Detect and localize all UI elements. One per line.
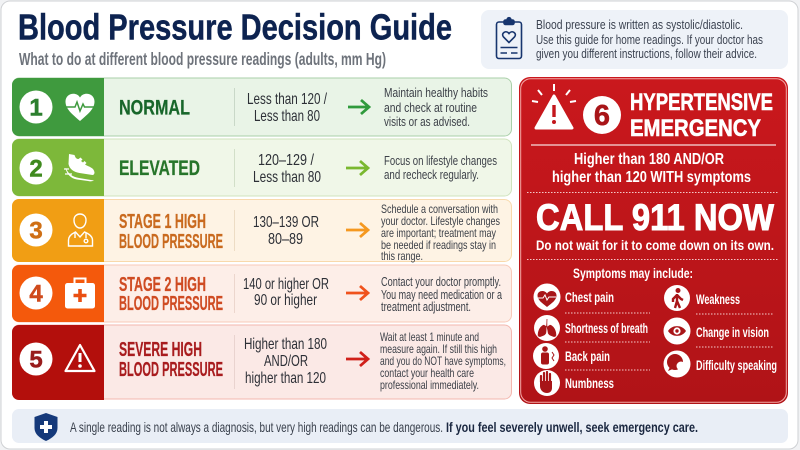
threshold: Higher than 180 AND/OR	[574, 151, 724, 168]
badge 5: 5	[29, 346, 43, 374]
panel: row 5 severe	[12, 325, 512, 400]
action: Schedule a conversation with	[381, 202, 498, 216]
action: visits or as advised.	[384, 115, 470, 129]
action: be needed if readings stay in	[381, 238, 496, 252]
reading	[253, 152, 321, 186]
symptoms list	[533, 284, 777, 396]
arrow	[348, 100, 369, 114]
reading: Higher than 180	[244, 336, 327, 353]
icon: shield	[34, 413, 58, 441]
info text	[536, 17, 763, 61]
icon: doctor	[68, 214, 92, 246]
action: this range.	[381, 249, 423, 263]
symptom: weakness	[664, 285, 740, 311]
symptom: numbness: Numbness	[565, 376, 614, 391]
label: BLOOD PRESSURE	[119, 293, 223, 315]
symptoms heading: Symptoms may include:	[573, 266, 693, 281]
action: You may need medication or a	[381, 288, 502, 302]
symptom: numbness	[534, 370, 614, 396]
symptom: back pain	[533, 343, 610, 369]
action: your doctor. Lifestyle changes	[381, 214, 500, 228]
arrow	[346, 286, 368, 300]
action	[384, 154, 497, 182]
action	[380, 330, 506, 392]
badge 3: 3	[29, 218, 43, 244]
action	[384, 86, 488, 129]
label: BLOOD PRESSURE	[119, 359, 223, 381]
label: NORMAL	[119, 96, 190, 120]
reading: Less than 120 /	[247, 91, 327, 108]
label: STAGE 2 HIGH	[119, 274, 206, 296]
action: Maintain healthy habits	[384, 86, 488, 100]
badge 4: 4	[29, 280, 43, 308]
panel: row 4 stage 2	[12, 265, 512, 322]
badge 6: 6	[594, 100, 610, 132]
action: Focus on lifestyle changes	[384, 154, 497, 168]
badge 6	[583, 96, 621, 134]
action: treatment adjustment.	[381, 300, 471, 314]
note text: A single reading is not always a diagnosis, but very high readings can be dangerous.	[70, 419, 443, 435]
threshold	[552, 151, 751, 186]
badge 2: 2	[29, 156, 43, 182]
action: and recheck regularly.	[384, 168, 479, 182]
badge 4	[20, 276, 52, 310]
reading: 130–139 OR	[253, 214, 319, 231]
symptom: difficulty speaking	[664, 350, 777, 378]
threshold: higher than 120 WITH symptoms	[552, 169, 751, 186]
label: ELEVATED	[119, 157, 200, 180]
panel: row 3 stage 1	[12, 199, 512, 263]
action	[381, 275, 502, 314]
action: measure again. If still this high	[380, 342, 497, 356]
action: and check at routine	[384, 101, 477, 115]
icon: running shoe	[64, 154, 94, 181]
action: are important; treatment may	[381, 226, 496, 240]
action: Wait at least 1 minute and	[380, 330, 479, 344]
arrow	[346, 161, 368, 175]
reading: Less than 80	[253, 169, 321, 186]
label: STAGE 1 HIGH	[119, 211, 206, 233]
icon: first aid kit	[65, 278, 95, 308]
symptom: chest pain: Chest pain	[565, 290, 614, 305]
reading	[243, 276, 329, 309]
title: Blood Pressure Decision Guide	[18, 6, 452, 48]
panel: info box	[481, 10, 788, 69]
reading	[253, 214, 319, 248]
reading: AND/OR	[264, 353, 308, 370]
reading: 140 or higher OR	[243, 276, 329, 293]
heading: EMERGENCY	[630, 115, 761, 142]
reading: 120–129 /	[258, 152, 314, 169]
symptom: weakness: Weakness	[696, 292, 740, 307]
reading	[244, 336, 327, 387]
badge 1: 1	[29, 94, 43, 122]
icon: clipboard	[496, 18, 522, 58]
reading: higher than 120	[245, 370, 326, 387]
panel: row 2 elevated	[12, 139, 512, 196]
reading: Less than 80	[254, 108, 320, 125]
icon: warning triangle	[66, 345, 94, 371]
action: contact your health care	[380, 366, 474, 380]
symptom: change in vision	[664, 318, 769, 344]
label	[119, 339, 223, 381]
action: and you do NOT have symptoms,	[380, 354, 506, 368]
reading: 80–89	[268, 231, 303, 248]
action: professional immediately.	[380, 378, 479, 392]
panel: row 1 normal	[12, 78, 512, 136]
call to action: CALL 911 NOW	[536, 197, 774, 238]
symptom: chest pain	[534, 284, 614, 310]
icon: alarm triangle	[532, 84, 576, 128]
arrow	[346, 223, 368, 237]
label: BLOOD PRESSURE	[119, 231, 223, 253]
subtitle: What to do at different blood pressure readings (adults, mm Hg)	[19, 49, 386, 69]
arrow	[346, 352, 368, 366]
heading	[630, 89, 773, 142]
label	[119, 211, 223, 253]
symptom: shortness of breath	[534, 315, 648, 341]
note text: If you feel severely unwell, seek emergency care.	[446, 419, 698, 435]
label: SEVERE HIGH	[119, 339, 202, 361]
icon: heart with pulse	[66, 94, 94, 121]
info text: Blood pressure is written as systolic/diastolic.	[536, 17, 743, 32]
symptom: shortness of breath: Shortness of breath	[565, 321, 648, 336]
badge 1	[20, 90, 52, 124]
symptom: back pain: Back pain	[565, 349, 610, 364]
action	[381, 202, 500, 263]
reading: 90 or higher	[254, 292, 317, 309]
action: Contact your doctor promptly.	[381, 275, 501, 289]
badge 3	[20, 214, 52, 246]
panel: bottom note	[12, 409, 788, 443]
badge 5	[20, 342, 52, 376]
label	[119, 274, 223, 315]
badge 2	[20, 152, 52, 184]
panel: hypertensive emergency	[519, 77, 788, 404]
reading	[247, 91, 327, 125]
